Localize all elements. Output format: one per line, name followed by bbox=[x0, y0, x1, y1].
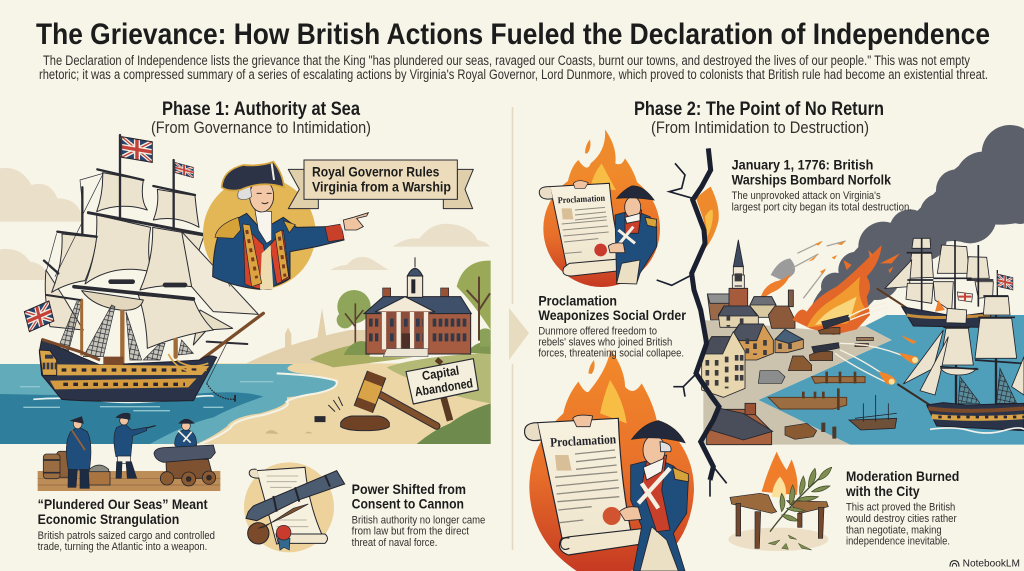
coat bbox=[213, 213, 344, 289]
body: moderation: independence inevitable. bbox=[846, 536, 950, 548]
governor portrait medallion bbox=[203, 162, 368, 290]
panel: lower proclamation and moderation: with the City bbox=[845, 483, 920, 499]
lower proclamation scroll bbox=[525, 415, 648, 555]
colonial capitol building bbox=[364, 257, 471, 357]
sign: capital abandoned: Capital bbox=[421, 364, 460, 383]
ship: rigging nets bbox=[47, 173, 230, 383]
body: norfolk: The unprovoked attack on Virginia's bbox=[732, 190, 881, 202]
body: proclamation bbox=[538, 326, 684, 360]
phase 2 heading bbox=[634, 99, 884, 137]
ship: masts and yards bbox=[44, 135, 263, 365]
body: moderation bbox=[845, 502, 957, 548]
mooring posts bbox=[823, 423, 834, 439]
deck cannon bbox=[154, 445, 216, 486]
smoke cloud bbox=[810, 125, 1024, 312]
town buildings bbox=[702, 240, 803, 397]
hand bbox=[343, 213, 368, 230]
panel: lower proclamation and moderation bbox=[525, 349, 1020, 571]
phase 1 heading: Phase 1: Authority at Sea bbox=[162, 99, 360, 120]
panel: plundered our seas: Consent to Cannon bbox=[352, 496, 464, 512]
body: power shifted: threat of naval force. bbox=[352, 537, 437, 549]
notebooklm logo: NotebookLM bbox=[963, 559, 1020, 570]
sign: capital abandoned: Abandoned bbox=[414, 376, 474, 399]
front house bbox=[706, 403, 773, 445]
lower proclamation scroll: Proclamation bbox=[550, 431, 617, 450]
body: plundered: trade, turning the Atlantic into a weapon. bbox=[38, 541, 207, 553]
ship: flags bbox=[24, 137, 193, 332]
town clock and belfry details bbox=[727, 273, 749, 287]
cannon shots bbox=[792, 241, 913, 382]
icon: cannon on scroll bbox=[244, 462, 345, 552]
heading: moderation: Moderation Burned bbox=[846, 468, 959, 484]
banner: royal governor bbox=[288, 160, 473, 209]
body: moderation: than negotiate, making bbox=[846, 524, 942, 536]
face and wig bbox=[250, 180, 274, 212]
quay and ground bbox=[703, 320, 892, 445]
cravat bbox=[255, 210, 272, 243]
phase 1 heading: (From Governance to Intimidation) bbox=[151, 119, 371, 137]
sign: capital abandoned bbox=[406, 359, 478, 421]
panel: phase 1 illustration bbox=[0, 135, 491, 444]
banner: royal governor: Virginia from a Warship bbox=[312, 179, 451, 195]
text: norfolk and proclamation: Weaponizes Social Order bbox=[538, 307, 686, 323]
burning town flames bbox=[793, 245, 900, 335]
body: norfolk bbox=[732, 190, 912, 213]
upper medallion flames bbox=[543, 129, 660, 287]
lower soldier bbox=[619, 421, 688, 571]
body: power shifted: from law but from the direct bbox=[352, 526, 470, 538]
soldiers bbox=[66, 413, 197, 488]
phase 1 heading bbox=[151, 99, 371, 137]
clouds bbox=[0, 168, 490, 280]
heading: norfolk: January 1, 1776: British bbox=[732, 156, 873, 172]
foreground warship sails bbox=[897, 296, 1024, 407]
heading: proclamation: Proclamation bbox=[538, 293, 617, 309]
barrels and crate bbox=[43, 451, 110, 485]
phase 2 heading: (From Intimidation to Destruction) bbox=[651, 119, 869, 137]
town windows bbox=[707, 315, 790, 388]
gavel bbox=[265, 374, 437, 434]
body: norfolk: largest port city began its total destruction. bbox=[732, 201, 912, 213]
distant town hills bbox=[245, 308, 370, 364]
body: plundered bbox=[38, 530, 215, 553]
trees bbox=[337, 261, 491, 355]
beach bbox=[197, 363, 491, 444]
body: power shifted: British authority no longer came bbox=[352, 515, 485, 527]
small boat bbox=[849, 395, 897, 430]
central crack bbox=[657, 148, 727, 497]
text: norfolk and proclamation bbox=[538, 156, 912, 360]
fireballs bbox=[808, 241, 919, 385]
deck bbox=[38, 471, 220, 491]
body: proclamation: forces, threatening social collapee. bbox=[538, 348, 684, 360]
upper proclamation scroll bbox=[539, 181, 628, 276]
divider with chevron bbox=[509, 107, 529, 550]
panel: norfolk bombardment scene bbox=[702, 238, 1024, 445]
panel: plundered our seas bbox=[38, 413, 485, 553]
sea bbox=[0, 364, 337, 444]
panel: upper proclamation medallion and smoke bbox=[539, 125, 1024, 312]
lower medallion flames bbox=[529, 349, 694, 571]
icon: burning table with olive branch bbox=[728, 452, 832, 551]
heading: plundered: “Plundered Our Seas” Meant bbox=[38, 496, 208, 512]
green lawn and bushes bbox=[310, 328, 491, 444]
phase 2 heading: Phase 2: The Point of No Return bbox=[634, 99, 884, 120]
piers bbox=[768, 372, 865, 410]
ship: hull bbox=[39, 339, 235, 402]
upper soldier bbox=[608, 186, 657, 284]
tricorn hat bbox=[222, 162, 284, 191]
body: proclamation: Dunmore offered freedom to bbox=[538, 326, 657, 338]
harbor water bbox=[758, 315, 1024, 445]
ship: mainsails and jibs bbox=[45, 173, 258, 348]
body: power shifted bbox=[352, 515, 485, 549]
burning smoke and small flame bbox=[760, 258, 795, 300]
waistcoat and lapels bbox=[243, 225, 272, 289]
panel: plundered our seas: Economic Strangulation bbox=[38, 511, 179, 527]
upper proclamation scroll: Proclamation bbox=[557, 193, 605, 205]
shore cannons bbox=[809, 315, 850, 361]
cargo, crates and cart bbox=[758, 337, 873, 439]
upper wax seal bbox=[594, 244, 607, 256]
text: norfolk and proclamation: Warships Bombard Norfolk bbox=[732, 171, 891, 187]
flame on crack bbox=[696, 187, 719, 251]
intro text bbox=[39, 53, 988, 82]
heading: power shifted: Power Shifted from bbox=[352, 481, 466, 497]
body: moderation: This act proved the British bbox=[846, 502, 955, 514]
body: plundered: British patrols saized cargo and controlled bbox=[38, 530, 215, 542]
body: moderation: would destroy cities rather bbox=[845, 513, 957, 525]
upper warship bbox=[877, 238, 1013, 327]
banner: royal governor: Royal Governor Rules bbox=[312, 164, 440, 180]
body: proclamation: rebels' slaves who joined British bbox=[538, 337, 672, 349]
foreground warship hull bbox=[927, 403, 1024, 433]
lower wax seal bbox=[603, 507, 621, 525]
